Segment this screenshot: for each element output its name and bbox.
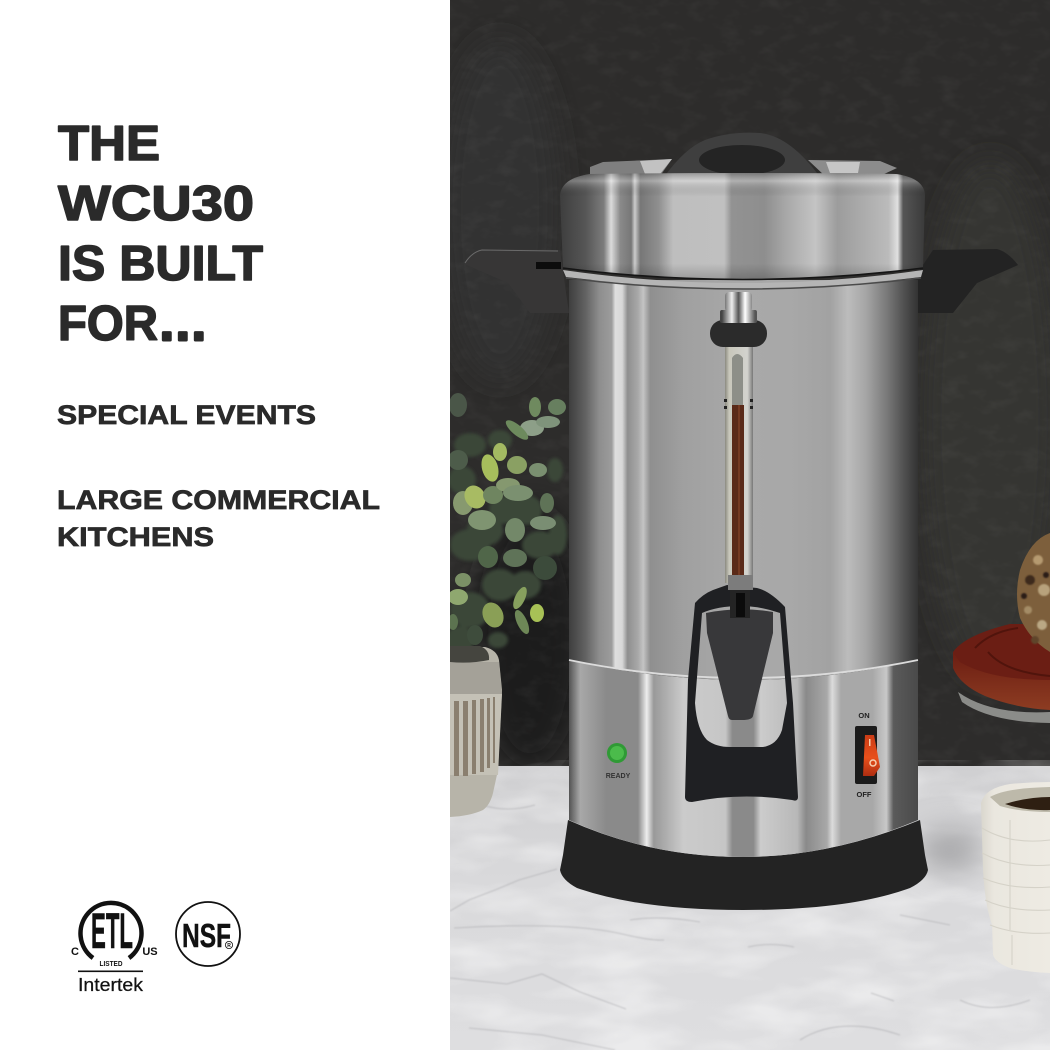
plant pot: [450, 646, 502, 817]
title: THE: [58, 117, 160, 171]
lid knob handle: [667, 132, 817, 174]
sight glass tube: [724, 345, 753, 583]
panel: product photo: [440, 0, 1050, 1050]
ready indicator light: READY: [606, 773, 631, 780]
title: [58, 117, 263, 351]
power switch: OFF: [856, 790, 872, 799]
title: FOR: [58, 297, 158, 351]
plant: [446, 393, 567, 654]
faucet body: [706, 609, 773, 720]
icon: ETL listed Intertek certification mark: ETL: [91, 903, 133, 959]
icon: NSF certification mark: [176, 902, 240, 966]
power switch: ON: [858, 711, 870, 720]
urn upper body: [569, 280, 918, 680]
urn lower body: [569, 660, 918, 857]
icon: ETL listed Intertek certification mark: C: [71, 946, 79, 958]
sight glass cap: [710, 320, 767, 347]
text: large commercial kitchens: KITCHENS: [57, 522, 214, 552]
muffin: [1017, 533, 1050, 652]
dark slate wall: [440, 0, 1050, 770]
panel: white text column: [0, 0, 450, 1050]
icon: ETL listed Intertek certification mark: US: [142, 946, 158, 958]
icon: ETL listed Intertek certification mark: LISTED: [100, 961, 122, 968]
text: large commercial kitchens: LARGE COMMERCIAL: [57, 485, 380, 515]
text: special events: SPECIAL EVENTS: [57, 400, 316, 430]
title: WCU30: [58, 177, 254, 231]
faucet frame: [685, 585, 798, 802]
chrome knob: [720, 292, 757, 323]
icon: ETL listed Intertek certification mark: [71, 903, 158, 995]
text: large commercial kitchens: [57, 485, 380, 552]
seam ring: [569, 660, 918, 678]
coffee urn: [464, 133, 1018, 910]
lid top trim: [590, 159, 897, 174]
faucet lever: [728, 575, 753, 618]
icon: NSF certification mark: NSF: [182, 917, 231, 954]
urn handles: [464, 249, 1018, 313]
cutting board: [953, 624, 1050, 723]
ready indicator light: [606, 743, 631, 780]
coffee cup: [981, 782, 1050, 973]
urn base: [560, 820, 928, 910]
marble counter: [450, 766, 1050, 1050]
icon: ETL listed Intertek certification mark: Intertek: [78, 974, 144, 995]
icon: NSF certification mark: R: [227, 943, 231, 949]
urn lid: [560, 173, 925, 289]
title: ...: [160, 297, 208, 351]
power switch: [855, 711, 880, 799]
title: IS BUILT: [58, 237, 263, 291]
